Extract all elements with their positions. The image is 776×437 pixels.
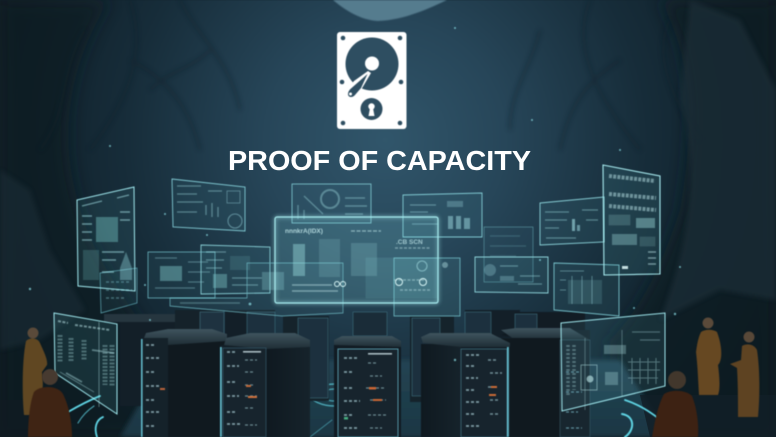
holo panel: mid centre left <box>201 245 270 294</box>
holo panel: right tall <box>603 165 660 275</box>
icon: actuator arm <box>345 71 371 99</box>
icon: hard drive <box>337 32 406 129</box>
monk: right front <box>652 371 698 437</box>
floor steps right <box>640 395 776 437</box>
server rack 1 <box>141 329 227 437</box>
icon: platter <box>346 38 398 90</box>
holo panel: upper left tall <box>77 187 135 291</box>
monk: left standing <box>23 328 47 415</box>
monk: right standing one <box>696 318 721 395</box>
ceiling opening <box>333 0 447 21</box>
holo panel: low centre <box>170 263 343 316</box>
icon: lock <box>360 98 382 120</box>
holo panel: lower left <box>54 313 117 414</box>
glowing floor rings <box>68 384 658 437</box>
floating particles <box>29 27 681 361</box>
server rack 4 <box>421 333 510 437</box>
monk: right standing two <box>730 332 759 417</box>
holo panel: faint right rear <box>484 227 533 282</box>
server rack 3 <box>334 336 401 437</box>
title: PROOF OF CAPACITY <box>228 145 531 176</box>
server rack 5 <box>501 328 590 437</box>
floor <box>120 360 670 437</box>
holo panel: top left <box>172 179 245 231</box>
holo panel: centre lower right <box>394 258 460 316</box>
icon: screws <box>340 36 403 125</box>
holo panel: main large <box>275 217 438 303</box>
holo panel: right centre <box>475 257 548 293</box>
back row servers <box>104 310 585 406</box>
monk: left front <box>28 369 72 437</box>
floor steps left <box>0 400 60 437</box>
holo panel: top right centre <box>403 193 482 237</box>
holo panel: lower right <box>561 313 665 411</box>
holo panel: far left small <box>100 268 137 313</box>
holo panel: top centre <box>292 184 371 223</box>
panel heading: nnnkrA(IDX) <box>285 228 323 235</box>
holo panel: right lower <box>554 263 619 316</box>
holo panel: main large: .CB SCN <box>396 239 423 246</box>
holo panel: mid left <box>148 252 215 298</box>
server rack 2 <box>220 333 310 437</box>
holo panel: right upper <box>540 197 604 245</box>
